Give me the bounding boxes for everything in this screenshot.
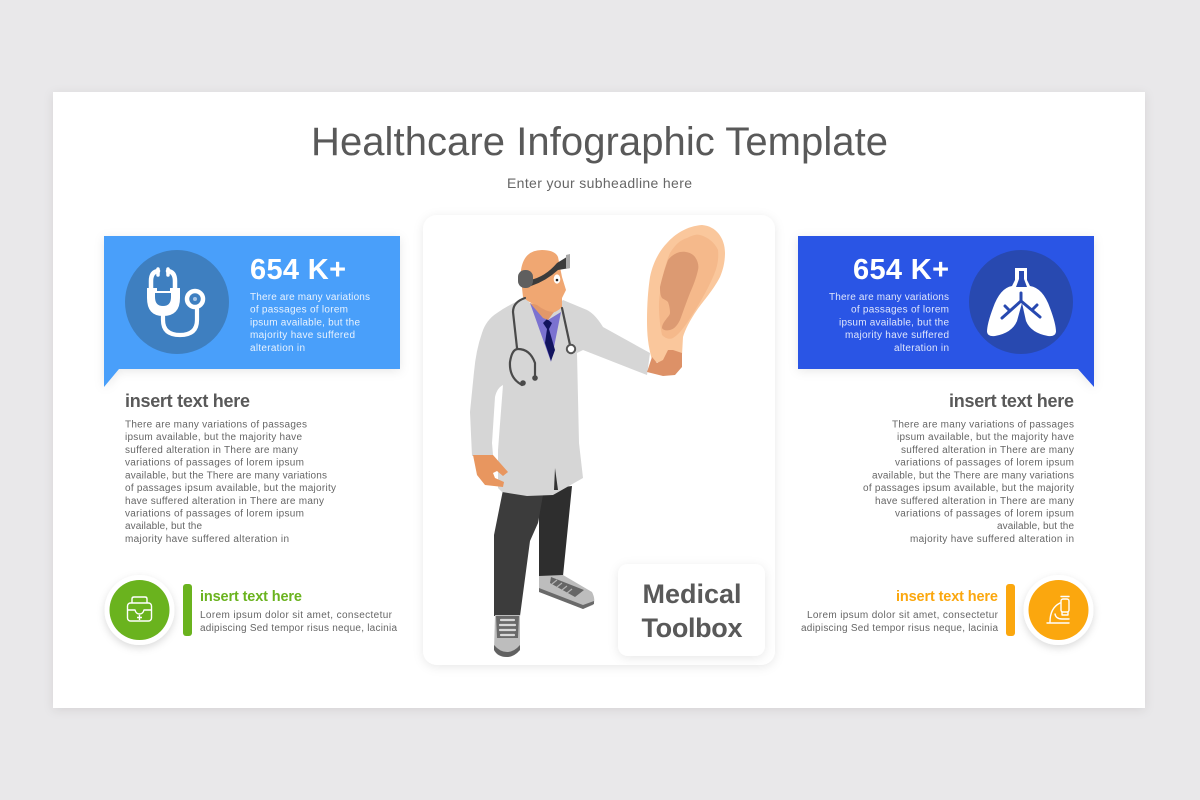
subheadline: Enter your subheadline here [507, 175, 692, 191]
callout text [200, 610, 397, 634]
left section heading: insert text here [125, 391, 250, 411]
label: Medical Toolbox [618, 564, 765, 656]
statistic description: ipsum available, but the [250, 318, 360, 328]
accent bar [1006, 584, 1015, 636]
right body text: have suffered alteration in There are many [875, 496, 1074, 507]
accent bar [183, 584, 192, 636]
giant ear [647, 225, 725, 366]
front shoe [494, 615, 520, 657]
statistic description: ipsum available, but the [839, 318, 949, 328]
coat slit [554, 468, 558, 490]
callout text: adipiscing Sed tempor risus neque, lacinia [801, 623, 998, 634]
label: Medical Toolbox: Toolbox [642, 613, 742, 643]
shirt and tie [530, 303, 561, 362]
callout text: Lorem ipsum dolor sit amet, consectetur [807, 610, 999, 621]
right body text: There are many variations of passages [892, 420, 1074, 430]
right body text: of passages ipsum available, but the majority [863, 483, 1074, 494]
statistic description: alteration in [894, 343, 949, 354]
head [521, 250, 566, 313]
back shoe [539, 575, 594, 609]
eye [554, 274, 560, 284]
callout heading: insert text here [200, 589, 302, 605]
callout heading: insert text here [896, 589, 998, 605]
panel: left blue statistic [104, 236, 400, 387]
right body text: ipsum available, but the majority have [897, 432, 1074, 443]
right section heading: insert text here [949, 391, 1074, 411]
right body text: majority have suffered alteration in [910, 534, 1074, 545]
right body text: available, but the [997, 521, 1074, 532]
icon: toolbox [104, 575, 174, 645]
icon: stethoscope [125, 250, 229, 354]
statistic description: majority have suffered [845, 330, 949, 341]
statistic description: alteration in [250, 343, 305, 354]
icon: lungs [969, 250, 1073, 354]
statistic description: of passages of lorem [250, 304, 348, 316]
statistic description [829, 292, 949, 354]
icon: microscope [1024, 575, 1094, 645]
left body text: ipsum available, but the majority have [125, 432, 302, 443]
hand holding ear [647, 350, 682, 376]
right body text: available, but the There are many variations [872, 470, 1074, 482]
left body text: available, but the [125, 521, 202, 532]
left body text: There are many variations of passages [125, 420, 307, 430]
callout: right orange [801, 575, 1094, 645]
stethoscope [510, 298, 575, 386]
right body text: variations of passages of lorem ipsum [895, 458, 1074, 468]
left body text [125, 420, 336, 545]
statistic description: There are many variations [250, 292, 370, 303]
left body text: suffered alteration in There are many [125, 445, 298, 456]
statistic description: of passages of lorem [851, 304, 949, 316]
statistic value: 654 K+ [853, 254, 949, 286]
slide card [53, 92, 1145, 708]
left body text: available, but the There are many variations [125, 470, 327, 482]
callout text [801, 610, 999, 634]
left hand [473, 455, 508, 487]
callout: left green [104, 575, 397, 645]
back leg [538, 486, 572, 576]
front leg [494, 490, 543, 616]
label: Medical Toolbox: Medical [642, 579, 742, 609]
left body text: variations of passages of lorem ipsum [125, 508, 304, 520]
statistic description: majority have suffered [250, 330, 355, 341]
neck shadow [530, 303, 554, 320]
left body text: have suffered alteration in There are many [125, 496, 324, 507]
right body text [863, 420, 1074, 545]
statistic description: There are many variations [829, 292, 949, 303]
left body text: of passages ipsum available, but the majority [125, 483, 336, 494]
right body text: variations of passages of lorem ipsum [895, 508, 1074, 520]
statistic value: 654 K+ [250, 254, 346, 286]
lab coat [470, 298, 650, 496]
callout text: Lorem ipsum dolor sit amet, consectetur [200, 610, 393, 621]
panel: centre illustration [423, 215, 775, 665]
right body text: suffered alteration in There are many [901, 445, 1074, 456]
head lamp [518, 254, 570, 288]
callout text: adipiscing Sed tempor risus neque, lacinia [200, 623, 397, 634]
statistic description [250, 292, 370, 354]
left body text: majority have suffered alteration in [125, 534, 289, 545]
illustration: doctor holding a giant ear [470, 225, 725, 657]
title: Healthcare Infographic Template [311, 120, 888, 164]
left body text: variations of passages of lorem ipsum [125, 458, 304, 468]
panel: right blue statistic [798, 236, 1094, 387]
